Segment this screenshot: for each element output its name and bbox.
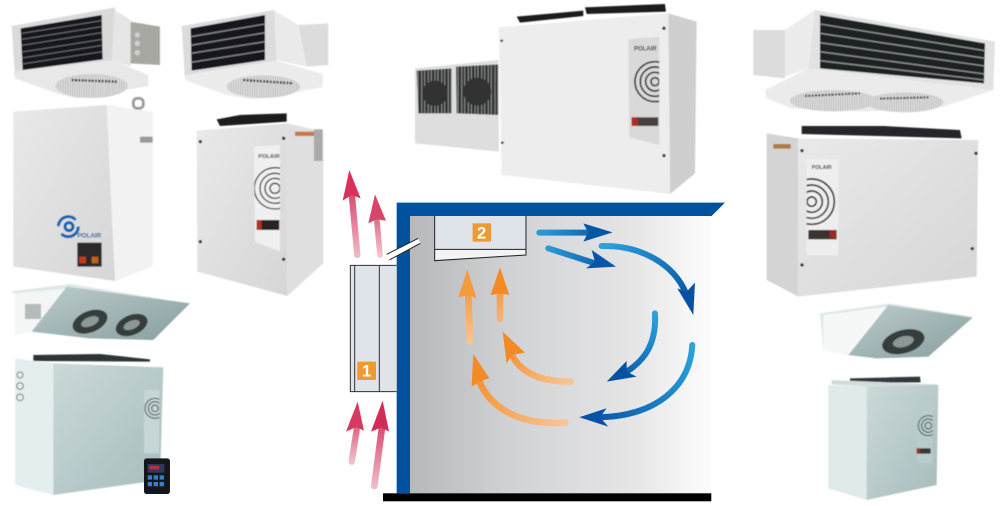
logo: Polair swirl bbox=[58, 217, 78, 237]
logo text: POLAIR bbox=[634, 47, 657, 53]
logo text: POLAIR bbox=[77, 233, 102, 240]
product: teal cabinet, right bbox=[828, 377, 938, 500]
arrow: air in, right bbox=[371, 401, 389, 486]
fan grille bbox=[806, 178, 836, 226]
arrow: cold air angled bbox=[548, 248, 616, 268]
product: second condensing cabinet bbox=[197, 113, 323, 296]
controller bbox=[144, 458, 170, 494]
control panel bbox=[77, 243, 102, 267]
unit 2: evaporator bbox=[435, 216, 526, 261]
product: top-left evaporator unit bbox=[12, 7, 160, 98]
product: low-profile evaporator, left bbox=[10, 284, 190, 341]
product: wide evaporator, top right bbox=[753, 10, 995, 112]
arrow: air in, left bbox=[346, 402, 364, 462]
fan grille bbox=[634, 60, 660, 103]
badge 1: 1 bbox=[362, 362, 371, 381]
arrow: hot air out, right bbox=[368, 194, 386, 255]
product: teal cabinet with controller, left bbox=[15, 354, 165, 495]
arrow: warm air inner curve bbox=[503, 332, 571, 382]
product: low-profile evaporator, right bbox=[820, 303, 973, 359]
arrow: hot air out, left bbox=[343, 170, 361, 255]
product: second evaporator unit bbox=[182, 10, 328, 99]
diagram: airflow through refrigerated room bbox=[343, 170, 725, 501]
insulated wall and ceiling bbox=[397, 203, 725, 493]
floor bbox=[383, 493, 711, 501]
product: twin-fan condensing unit, top centre bbox=[415, 4, 697, 194]
arrow: warm air outer curve bbox=[472, 354, 565, 423]
product: wide condensing cabinet, right bbox=[767, 126, 978, 297]
logo text: POLAIR bbox=[812, 165, 832, 171]
badge 2: 2 bbox=[477, 223, 486, 242]
fan grille bbox=[254, 166, 281, 210]
arrow: cold air straight bbox=[539, 223, 613, 242]
product: top-left condensing cabinet bbox=[13, 98, 153, 281]
arrow: cold air inner curve bbox=[607, 313, 655, 382]
arrow: cold air outer curve bbox=[602, 246, 695, 315]
connecting pipe through wall bbox=[387, 238, 420, 260]
room interior bbox=[409, 216, 711, 493]
arrow: warm air rising, left bbox=[458, 269, 477, 342]
arrow: warm air rising, right bbox=[491, 267, 509, 319]
arrow: cold air lower curve bbox=[579, 345, 692, 427]
logo text: POLAIR bbox=[258, 154, 280, 160]
unit 1: condensing unit bbox=[350, 265, 397, 392]
